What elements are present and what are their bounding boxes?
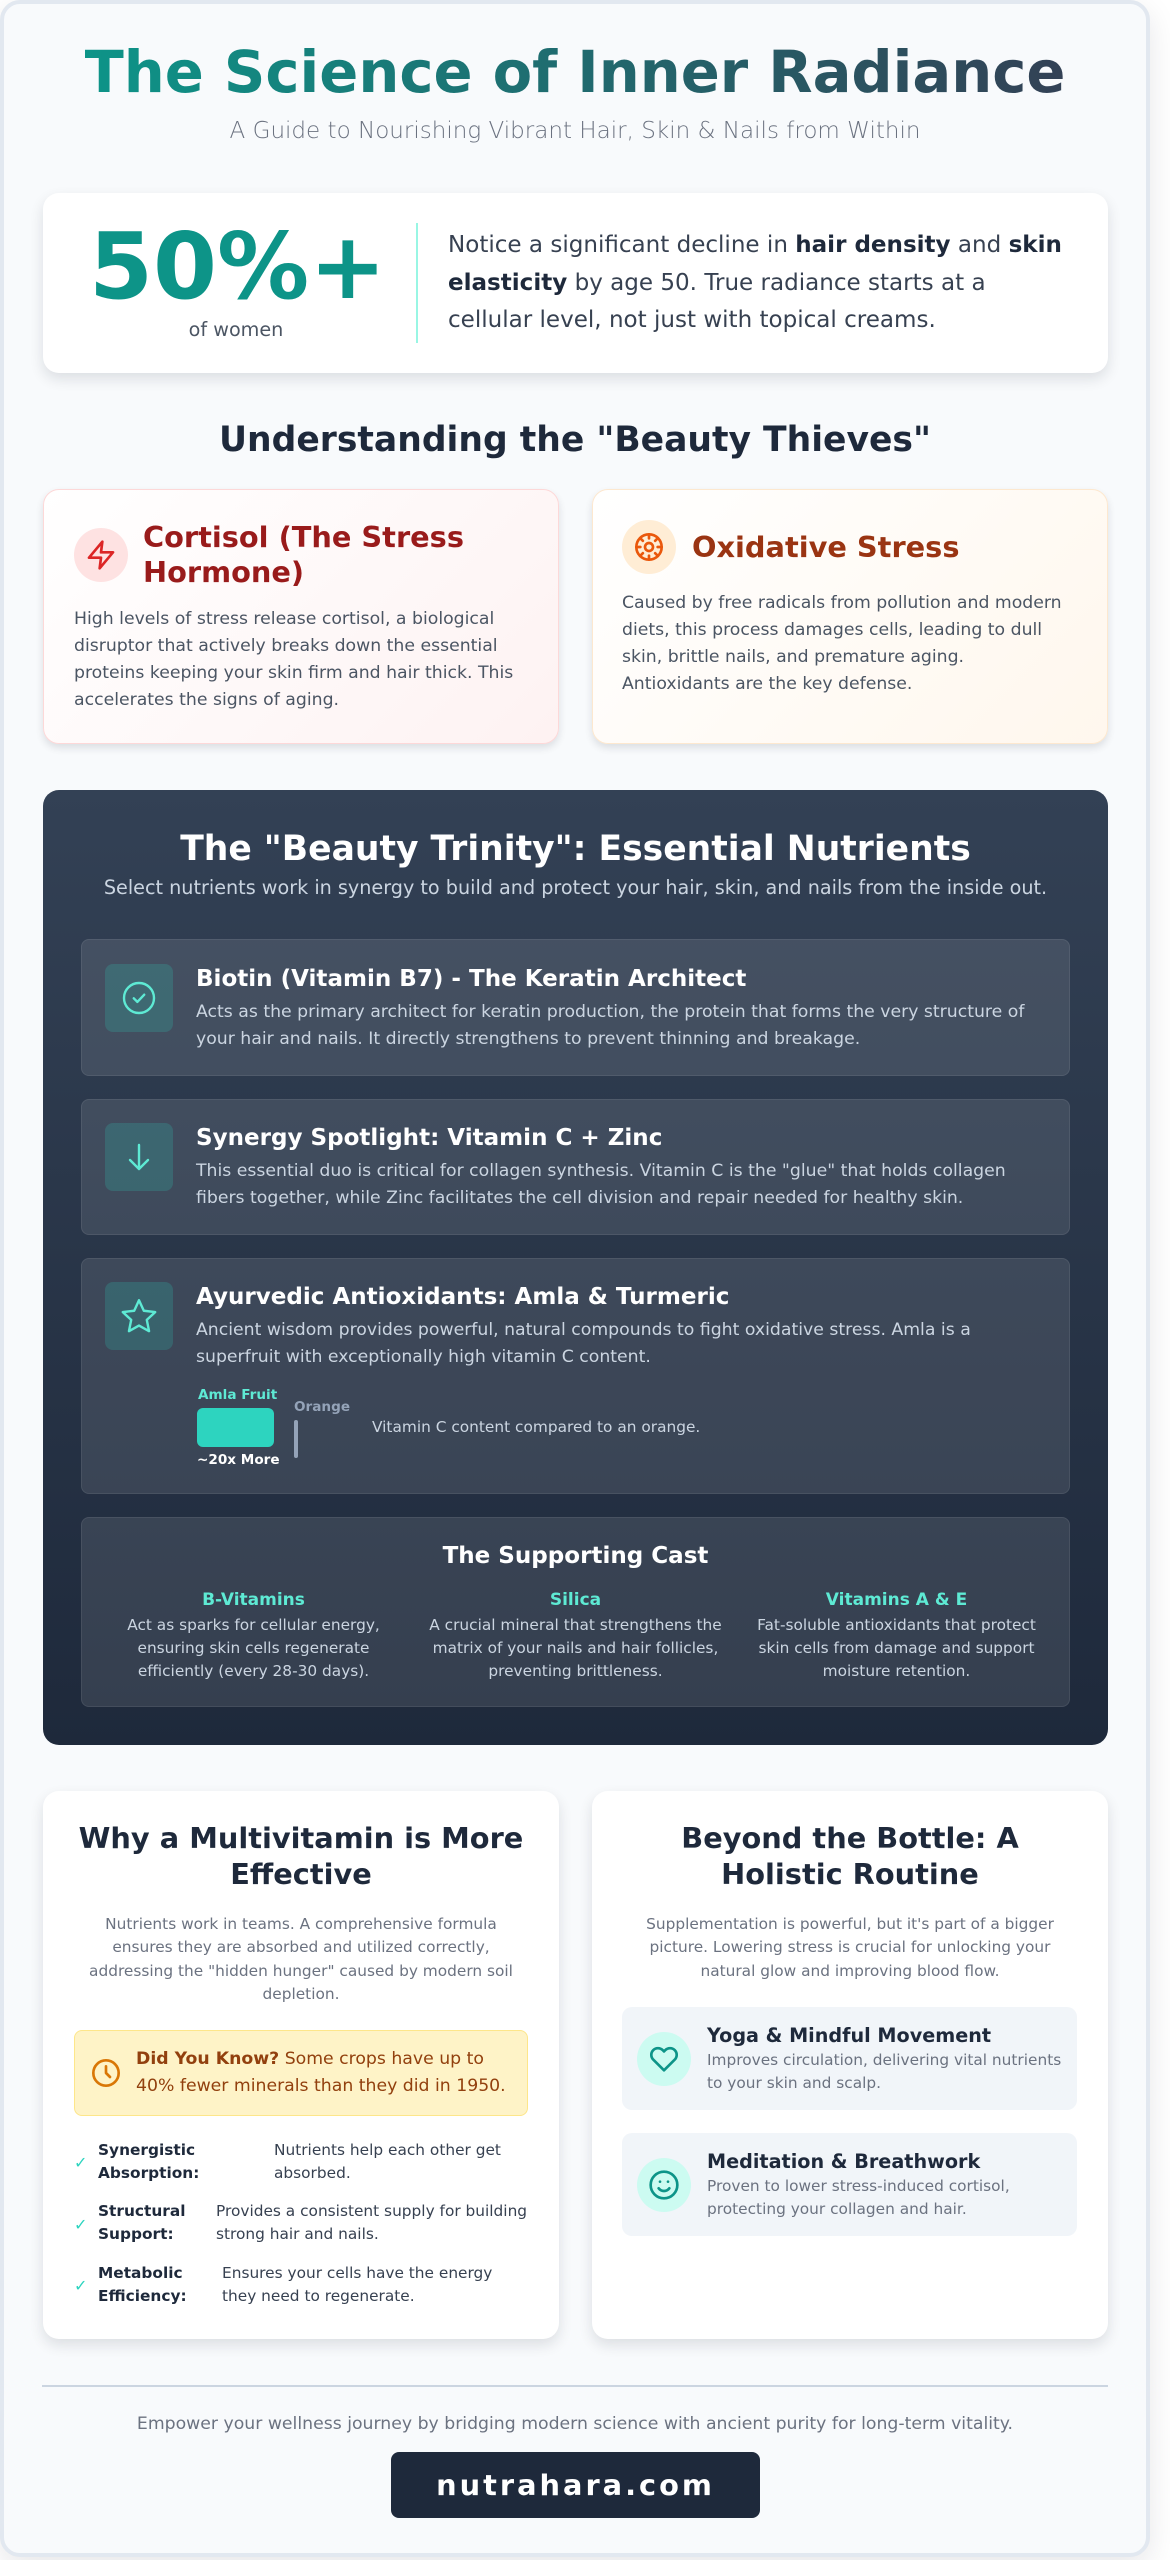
column: vitamins a and e	[757, 1590, 1036, 1680]
text: silica: matrix of your nails and hair follicles,	[433, 1639, 718, 1657]
heading: oxidative: Oxidative Stress	[692, 530, 959, 564]
text: meditation: protecting your collagen and hair.	[707, 2200, 967, 2218]
text: synergy: fibers together, while Zinc facilitates the cell division and repair needed for healthy skin.	[196, 1188, 963, 1208]
text: holistic routine: picture. Lowering stress is crucial for unlocking your	[650, 1938, 1050, 1956]
text: oxidative: Caused by free radicals from pollution and modern	[622, 593, 1062, 613]
heading: supporting cast: The Supporting Cast	[443, 1543, 708, 1569]
icon: check circle	[105, 964, 173, 1032]
text: holistic routine	[646, 1915, 1054, 1980]
text: meditation: Proven to lower stress-induced cortisol,	[707, 2177, 1010, 2195]
text: cortisol: proteins keeping your skin firm and hair thick. This	[74, 663, 513, 683]
benefit label: structural: Structural	[98, 2202, 186, 2220]
panel: 50% statistic	[43, 193, 1108, 373]
stat description: elasticity by age 50. True radiance starts at a	[448, 270, 986, 296]
check: ✓	[74, 2215, 87, 2234]
panel: beauty trinity	[43, 790, 1108, 1745]
text: oxidative	[622, 593, 1062, 694]
benefit text: synergistic	[274, 2141, 501, 2182]
benefit text: metabolic	[222, 2264, 492, 2305]
heading: cortisol	[143, 520, 464, 589]
card: yoga	[622, 2007, 1077, 2110]
text: vitamins a and e: Fat-soluble antioxidants that protect	[757, 1616, 1036, 1634]
benefit text: synergistic: Nutrients help each other get	[274, 2141, 501, 2159]
heading: silica: Silica	[550, 1590, 601, 1610]
card: biotin	[81, 939, 1070, 1076]
heading: meditation: Meditation & Breathwork	[707, 2150, 980, 2173]
heading: cortisol: Hormone)	[143, 555, 304, 589]
heading: ayurvedic: Ayurvedic Antioxidants: Amla & Turmeric	[196, 1284, 729, 1310]
heading: holistic routine	[681, 1821, 1019, 1890]
check: ✓	[74, 2276, 87, 2295]
benefit text: synergistic: absorbed.	[274, 2164, 351, 2182]
text: multivitamin: Nutrients work in teams. A comprehensive formula	[105, 1915, 497, 1933]
text: yoga: Improves circulation, delivering vital nutrients	[707, 2051, 1061, 2069]
text: b-vitamins: efficiently (every 28-30 days).	[138, 1662, 369, 1680]
text: silica: preventing brittleness.	[488, 1662, 663, 1680]
panel: holistic routine	[592, 1791, 1108, 2339]
benefit text: structural: strong hair and nails.	[216, 2225, 379, 2243]
text: ayurvedic: Ancient wisdom provides powerful, natural compounds to fight oxidative stress. Amla is a	[196, 1320, 971, 1340]
text: cortisol: accelerates the signs of aging.	[74, 690, 339, 710]
column: silica	[429, 1590, 722, 1680]
text: yoga	[707, 2051, 1061, 2092]
label: amla: Amla Fruit	[198, 1387, 277, 1403]
text: biotin	[196, 1002, 1025, 1049]
panel: oxidative stress	[592, 489, 1108, 744]
stat description: Notice a significant decline in hair density and skin	[448, 232, 1062, 258]
callout text: 40% fewer minerals than they did in 1950.	[136, 2076, 506, 2096]
text: biotin: Acts as the primary architect for keratin production, the protein that forms the very structure of	[196, 1002, 1024, 1022]
text: synergy	[196, 1161, 1006, 1208]
bar: amla	[197, 1408, 274, 1447]
text: oxidative: diets, this process damages cells, leading to dull	[622, 620, 1042, 640]
footer url badge: nutrahara.com	[436, 2468, 715, 2502]
text: cortisol	[74, 609, 513, 710]
text: holistic routine: Supplementation is powerful, but it's part of a bigger	[646, 1915, 1054, 1933]
card: supporting cast	[81, 1517, 1070, 1707]
benefit text: structural	[216, 2202, 527, 2243]
benefit text: metabolic: they need to regenerate.	[222, 2287, 415, 2305]
text: vitamins a and e	[757, 1616, 1036, 1680]
heading: holistic routine: Holistic Routine	[721, 1856, 979, 1890]
heading: yoga: Yoga & Mindful Movement	[707, 2024, 991, 2047]
benefit text: metabolic: Ensures your cells have the energy	[222, 2264, 492, 2282]
text: cortisol: High levels of stress release cortisol, a biological	[74, 609, 494, 629]
heading: beauty thieves: Understanding the "Beauty Thieves"	[219, 420, 931, 460]
stat description: cellular level, not just with topical creams.	[448, 307, 936, 333]
callout text: Did You Know? Some crops have up to	[136, 2049, 484, 2069]
check: ✓	[74, 2153, 87, 2172]
benefit label: structural	[98, 2202, 186, 2243]
benefit label: metabolic	[98, 2264, 187, 2305]
callout text	[136, 2049, 506, 2096]
text: oxidative: skin, brittle nails, and premature aging.	[622, 647, 964, 667]
list: benefits	[74, 2141, 527, 2305]
card: ayurvedic	[81, 1258, 1070, 1494]
text: trinity subtitle: Select nutrients work in synergy to build and protect your hair, skin, and nails from the inside out.	[104, 876, 1047, 899]
text: meditation	[707, 2177, 1010, 2218]
bar: orange	[294, 1420, 298, 1458]
text: b-vitamins: ensuring skin cells regenerate	[138, 1639, 369, 1657]
chart: amla vs orange	[197, 1387, 700, 1468]
text: holistic routine: natural glow and improving blood flow.	[700, 1962, 1000, 1980]
panel: cortisol	[43, 489, 559, 744]
text: multivitamin: addressing the "hidden hunger" caused by modern soil	[89, 1962, 513, 1980]
text: vitamins a and e: skin cells from damage and support	[758, 1639, 1035, 1657]
icon: star	[105, 1282, 173, 1350]
value: amla: ~20x More	[197, 1452, 280, 1468]
text: silica	[429, 1616, 722, 1680]
heading: multivitamin: Effective	[230, 1856, 372, 1890]
icon: arrow down	[105, 1123, 173, 1191]
benefit label: structural: Support:	[98, 2225, 174, 2243]
benefit label: synergistic	[98, 2141, 199, 2182]
icon: heart	[637, 2032, 691, 2086]
callout: did you know	[74, 2030, 528, 2116]
icon: smile	[637, 2158, 691, 2212]
subtitle: A Guide to Nourishing Vibrant Hair, Skin & Nails from Within	[230, 118, 920, 144]
icon: gear	[622, 520, 676, 574]
text: biotin: your hair and nails. It directly strengthens to prevent thinning and breakage.	[196, 1029, 860, 1049]
heading: biotin: Biotin (Vitamin B7) - The Keratin Architect	[196, 966, 746, 992]
heading: vitamins a and e: Vitamins A & E	[826, 1590, 967, 1610]
caption: chart: Vitamin C content compared to an orange.	[372, 1418, 700, 1436]
card: meditation	[622, 2133, 1077, 2236]
text: multivitamin: depletion.	[262, 1985, 339, 2003]
text: synergy: This essential duo is critical for collagen synthesis. Vitamin C is the "glue" that holds collagen	[196, 1161, 1006, 1181]
text: b-vitamins	[127, 1616, 380, 1680]
benefit label: metabolic: Metabolic	[98, 2264, 183, 2282]
text: cortisol: disruptor that actively breaks down the essential	[74, 636, 498, 656]
divider	[416, 223, 418, 343]
label: orange: Orange	[294, 1399, 350, 1415]
column: b-vitamins	[127, 1590, 380, 1680]
text: silica: A crucial mineral that strengthens the	[429, 1616, 722, 1634]
text: yoga: to your skin and scalp.	[707, 2074, 881, 2092]
heading: synergy: Synergy Spotlight: Vitamin C + Zinc	[196, 1125, 662, 1151]
icon: lightning	[74, 528, 128, 582]
heading: multivitamin	[79, 1821, 523, 1890]
card: synergy	[81, 1099, 1070, 1235]
panel: multivitamin	[43, 1791, 559, 2339]
benefit text: structural: Provides a consistent supply for building	[216, 2202, 527, 2220]
text: b-vitamins: Act as sparks for cellular energy,	[127, 1616, 380, 1634]
heading: beauty trinity: The "Beauty Trinity": Essential Nutrients	[180, 829, 971, 869]
heading: holistic routine: Beyond the Bottle: A	[681, 1821, 1019, 1855]
text: ayurvedic	[196, 1320, 971, 1367]
benefit label: synergistic: Synergistic	[98, 2141, 195, 2159]
benefit label: synergistic: Absorption:	[98, 2164, 199, 2182]
heading: b-vitamins: B-Vitamins	[202, 1590, 305, 1610]
title: The Science of Inner Radiance	[85, 39, 1065, 106]
benefit label: metabolic: Efficiency:	[98, 2287, 187, 2305]
big number: 50%+	[89, 213, 386, 320]
heading: cortisol: Cortisol (The Stress	[143, 520, 464, 554]
icon: clock	[92, 2059, 120, 2087]
footer url badge	[391, 2452, 760, 2518]
text: vitamins a and e: moisture retention.	[823, 1662, 970, 1680]
stat description	[448, 232, 1062, 333]
text: multivitamin	[89, 1915, 513, 2003]
footer text: Empower your wellness journey by bridging modern science with ancient purity for long-term vitality.	[137, 2414, 1013, 2434]
heading: multivitamin: Why a Multivitamin is More	[79, 1821, 523, 1855]
text: oxidative: Antioxidants are the key defense.	[622, 674, 912, 694]
of women label: of women	[189, 318, 283, 341]
text: multivitamin: ensures they are absorbed and utilized correctly,	[112, 1938, 490, 1956]
text: ayurvedic: superfruit with exceptionally high vitamin C content.	[196, 1347, 651, 1367]
